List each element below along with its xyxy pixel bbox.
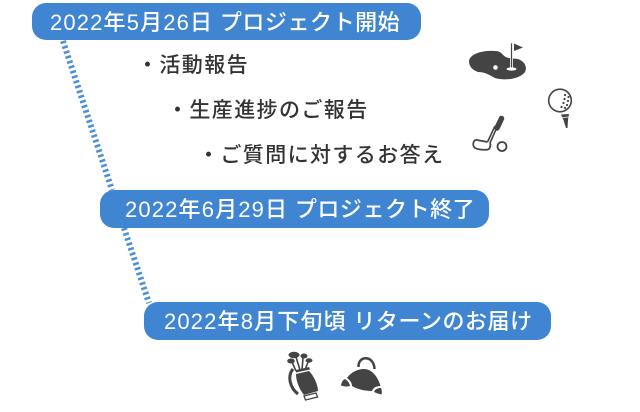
list item: answering questions: ・ご質問に対するお答え: [198, 144, 444, 167]
list item: activity report: ・活動報告: [137, 54, 249, 77]
milestone: project end: [100, 190, 489, 228]
milestone: project start: 2022年5月26日 プロジェクト開始: [50, 10, 400, 35]
list item: production progress report: ・生産進捗のご報告: [167, 99, 369, 122]
milestone: reward delivery: 2022年8月下旬頃 リターンのお届け: [164, 309, 533, 334]
milestone: project start: [32, 3, 421, 40]
milestone: project end: 2022年6月29日 プロジェクト終了: [125, 197, 475, 222]
milestone: reward delivery: [144, 302, 551, 340]
